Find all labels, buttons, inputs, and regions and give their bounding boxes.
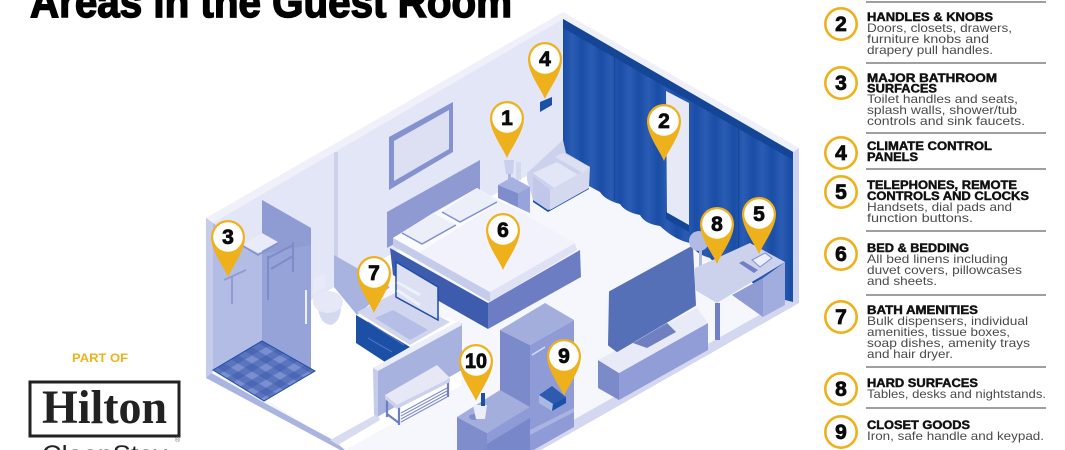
legend item 4 — [825, 137, 992, 169]
legend item 7: Bulk dispensers, individual — [867, 314, 1028, 328]
pin 8 — [700, 207, 734, 264]
shower shelf — [243, 233, 278, 253]
vanity — [356, 293, 450, 362]
legend item 3: Toilet handles and seats, — [867, 92, 1018, 106]
legend item 5: Handsets, dial pads and — [867, 200, 1012, 214]
room floor — [206, 172, 797, 450]
pin 2 — [647, 104, 681, 161]
bed — [390, 188, 581, 329]
illustration: isometric guest room — [206, 12, 799, 450]
legend item 5: function buttons. — [867, 211, 973, 225]
mirror — [396, 262, 438, 320]
television — [609, 247, 695, 351]
legend item 2: HANDLES & KNOBS — [867, 12, 993, 24]
legend item 5: TELEPHONES, REMOTE — [867, 180, 1017, 192]
cabinet with ice bucket — [457, 390, 530, 450]
legend item 3 — [825, 67, 1025, 128]
legend item 9: CLOSET GOODS — [867, 420, 970, 432]
legend item 8: Tables, desks and nightstands. — [867, 387, 1046, 401]
wardrobe closet — [500, 303, 574, 450]
legend item 7: BATH AMENITIES — [867, 305, 978, 317]
desk — [695, 243, 785, 340]
wall top edge — [206, 12, 799, 223]
legend item 4: 4 — [835, 142, 847, 165]
pin 9: 9 — [558, 345, 570, 368]
half wall — [373, 321, 462, 417]
pin 7 — [357, 256, 391, 313]
logo: Hilton CleanStay — [30, 381, 181, 450]
legend item 2: furniture knobs and — [867, 32, 989, 46]
nightstand with lamp — [498, 160, 530, 213]
floor edge — [206, 370, 345, 450]
legend item 4: PANELS — [867, 152, 918, 164]
legend item 3: MAJOR BATHROOM — [867, 73, 997, 85]
legend item 2 — [825, 8, 1012, 57]
legend item 7: amenities, tissue boxes, — [867, 325, 1010, 339]
logo: Hilton CleanStay: ® — [175, 436, 181, 444]
legend item 6: and sheets. — [867, 274, 937, 288]
legend item 3: 3 — [835, 72, 847, 95]
logo: Hilton CleanStay: Hilton — [42, 381, 167, 434]
legend item 6: BED & BEDDING — [867, 243, 969, 255]
headboard — [387, 160, 480, 248]
legend item 7: and hair dryer. — [867, 347, 953, 361]
legend item 4: CLIMATE CONTROL — [867, 141, 992, 153]
legend item 5: 5 — [835, 181, 847, 204]
legend item 3: SURFACES — [867, 84, 937, 96]
armchair — [527, 140, 590, 212]
legend item 2: 2 — [835, 13, 847, 36]
legend item 7 — [825, 301, 1030, 361]
pin 6: 6 — [497, 219, 509, 242]
legend item 5 — [825, 176, 1029, 225]
legend item 9 — [825, 416, 1044, 448]
legend item 6 — [825, 238, 1022, 288]
shower tile floor — [213, 341, 315, 401]
pin 5 — [742, 197, 776, 254]
pin 5: 5 — [753, 203, 765, 226]
pillows — [402, 213, 456, 244]
pin 3: 3 — [222, 226, 234, 249]
pin 8: 8 — [711, 213, 723, 236]
legend item 8 — [825, 373, 1046, 405]
curtain wall — [563, 19, 793, 302]
part of label: PART OF — [72, 351, 128, 365]
chair — [689, 231, 709, 272]
back wall — [206, 19, 563, 361]
pin 1 — [490, 101, 524, 158]
shower controls — [224, 270, 246, 304]
legend item 2: drapery pull handles. — [867, 43, 993, 57]
bath back wall — [334, 255, 390, 315]
ice bucket — [469, 414, 479, 420]
pin 9 — [547, 339, 581, 396]
pin 2: 2 — [658, 110, 670, 133]
legend item 7: 7 — [835, 306, 847, 329]
thermostat panel — [540, 97, 552, 112]
legend item 6: All bed linens including — [867, 252, 1008, 266]
wall picture — [389, 102, 453, 190]
legend item 3: controls and sink faucets. — [867, 114, 1025, 128]
desk phone and keyboard — [752, 253, 772, 267]
pin 7: 7 — [368, 262, 380, 285]
legend item 8: 8 — [835, 378, 847, 401]
legend item 9: Iron, safe handle and keypad. — [867, 429, 1044, 443]
towel rack — [268, 242, 293, 300]
legend item 3: splash walls, shower/tub — [867, 103, 1017, 117]
toilet — [313, 273, 343, 325]
pin 10 — [459, 344, 493, 401]
legend item 7: soap dishes, amenity trays — [867, 336, 1030, 350]
legend item 2: Doors, closets, drawers, — [867, 21, 1012, 35]
legend item 5: CONTROLS AND CLOCKS — [867, 191, 1029, 203]
safe — [539, 386, 566, 411]
legend item 9: 9 — [835, 421, 847, 444]
TV stand — [598, 308, 708, 400]
pin 4 — [528, 42, 562, 99]
pin 6 — [486, 213, 520, 270]
legend item 6: 6 — [835, 243, 847, 266]
legend item 8: HARD SURFACES — [867, 378, 978, 390]
bench — [385, 365, 450, 425]
pin 1: 1 — [501, 107, 513, 130]
legend list — [825, 2, 1046, 448]
pin 3 — [211, 220, 245, 277]
legend item 6: duvet covers, pillowcases — [867, 263, 1022, 277]
shower enclosure — [213, 200, 315, 401]
pin 10: 10 — [465, 350, 487, 373]
pin 4: 4 — [539, 48, 551, 71]
window — [666, 91, 689, 228]
